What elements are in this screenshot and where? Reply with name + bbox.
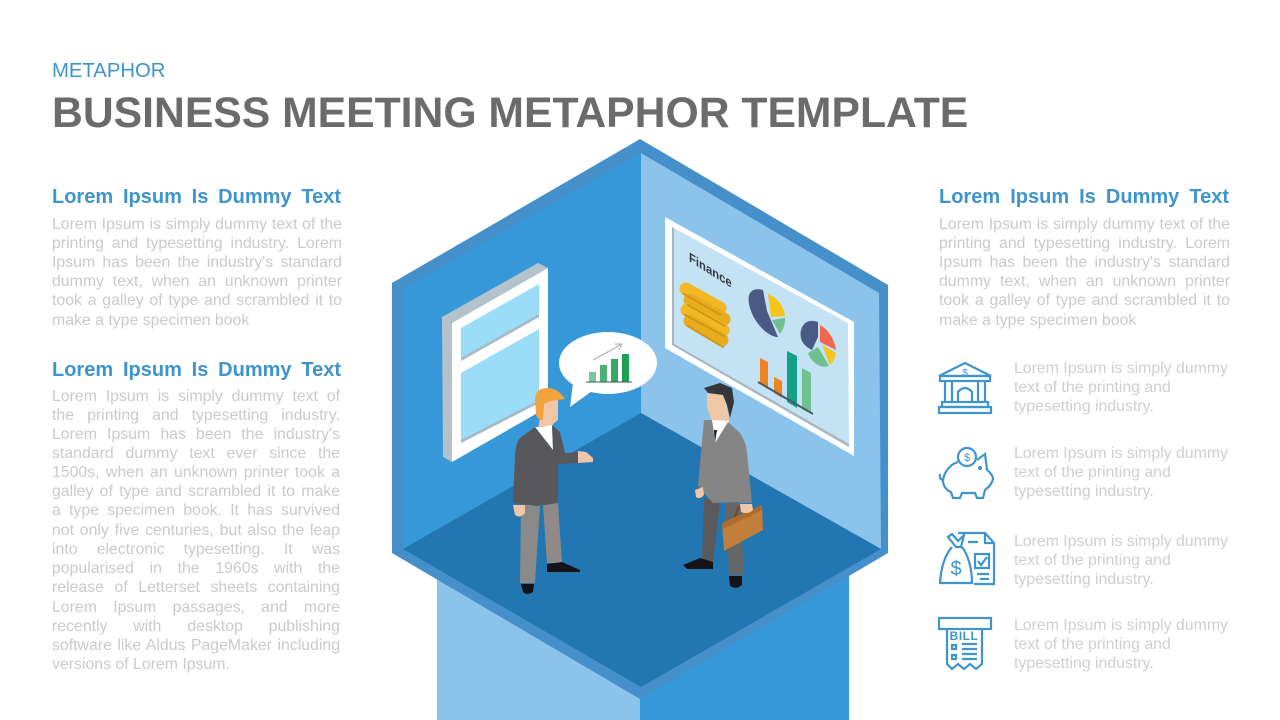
right heading: Lorem Ipsum Is Dummy Text xyxy=(939,186,1229,208)
pie chart one xyxy=(749,289,785,337)
speech bubble xyxy=(559,332,657,407)
icon: money bag and document: $ xyxy=(950,558,962,580)
bank item text: text of the printing and xyxy=(1014,379,1171,396)
left text block two: versions of Lorem Ipsum. xyxy=(52,656,230,673)
coins xyxy=(684,289,725,347)
piggy bank item text xyxy=(1014,445,1228,500)
left heading two: Lorem Ipsum Is Dummy Text xyxy=(52,359,341,381)
bank item text: Lorem Ipsum is simply dummy xyxy=(1014,360,1228,377)
icon: money bag and document xyxy=(940,533,994,584)
left text block two xyxy=(52,388,340,673)
man one xyxy=(513,388,593,594)
title: BUSINESS MEETING METAPHOR TEMPLATE xyxy=(52,89,968,137)
icon: bank: $ xyxy=(962,368,968,379)
pie chart two xyxy=(801,321,836,367)
money bag item text xyxy=(1014,533,1228,588)
left text block two: standard dummy text ever since the xyxy=(52,445,340,462)
bubble bars xyxy=(586,344,632,382)
right text block: printing and typesetting industry. Lorem xyxy=(939,235,1230,252)
bill item text: Lorem Ipsum is simply dummy xyxy=(1014,617,1228,634)
bank item text xyxy=(1014,360,1228,415)
left text block one: make a type specimen book xyxy=(52,312,249,329)
right text block: Lorem Ipsum is simply dummy text of the xyxy=(939,216,1230,233)
money bag item text: text of the printing and xyxy=(1014,552,1171,569)
left text block two: the printing and typesetting industry. xyxy=(52,407,340,424)
icon: bill xyxy=(939,618,991,669)
presentation board xyxy=(665,217,854,456)
left text block two: galley of type and scrambled it to make xyxy=(52,483,340,500)
icon: bank xyxy=(939,363,991,413)
piggy bank item text: typesetting industry. xyxy=(1014,483,1154,500)
left text block two: software like Aldus PageMaker including xyxy=(52,637,340,654)
piggy bank item text: text of the printing and xyxy=(1014,464,1171,481)
man two xyxy=(683,383,763,588)
left text block two: 1500s, when an unknown printer took a xyxy=(52,464,340,481)
left text block two: release of Letterset sheets containing xyxy=(52,579,340,596)
left text block two: popularised in the 1960s with the xyxy=(52,560,340,577)
left text block one: Ipsum has been the industry's standard xyxy=(52,254,342,271)
right text block: took a galley of type and scrambled it to xyxy=(939,292,1230,309)
label: metaphor: METAPHOR xyxy=(52,60,165,82)
piggy bank item text: Lorem Ipsum is simply dummy xyxy=(1014,445,1228,462)
floor xyxy=(403,413,881,687)
money bag item text: Lorem Ipsum is simply dummy xyxy=(1014,533,1228,550)
left text block two: Lorem Ipsum has been the industry's xyxy=(52,426,340,443)
left text block one xyxy=(52,216,342,329)
left text block one: took a galley of type and scrambled it to xyxy=(52,292,342,309)
room outer frame xyxy=(392,139,888,699)
money bag item text: typesetting industry. xyxy=(1014,571,1154,588)
left text block two: into electronic typesetting. It was xyxy=(52,541,340,558)
right text block: Ipsum has been the industry's standard xyxy=(939,254,1230,271)
left text block two: Lorem Ipsum is simply dummy text of xyxy=(52,388,340,405)
bar chart on board xyxy=(758,351,813,414)
window xyxy=(442,263,548,462)
icon: piggy bank xyxy=(940,448,993,498)
briefcase xyxy=(722,505,763,551)
left wall xyxy=(403,153,641,549)
left text block one: printing and typesetting industry. Lorem xyxy=(52,235,342,252)
icon: piggy bank: $ xyxy=(964,452,970,464)
left text block one: Lorem Ipsum is simply dummy text of the xyxy=(52,216,342,233)
left text block two: not only five centuries, but also the leap xyxy=(52,522,340,539)
pedestal column xyxy=(437,570,849,720)
right text block xyxy=(939,216,1230,329)
bill item text: text of the printing and xyxy=(1014,636,1171,653)
left heading one: Lorem Ipsum Is Dummy Text xyxy=(52,186,341,208)
left text block two: Lorem Ipsum passages, and more xyxy=(52,599,340,616)
bill item text xyxy=(1014,617,1228,672)
left text block two: a type specimen book. It has survived xyxy=(52,502,340,519)
bank item text: typesetting industry. xyxy=(1014,398,1154,415)
left text block one: dummy text, when an unknown printer xyxy=(52,273,342,290)
right text block: dummy text, when an unknown printer xyxy=(939,273,1230,290)
right text block: make a type specimen book xyxy=(939,312,1136,329)
board heading: Finance: Finance xyxy=(689,249,732,291)
bill item text: typesetting industry. xyxy=(1014,655,1154,672)
left text block two: recently with desktop publishing xyxy=(52,618,340,635)
icon: bill: BILL xyxy=(950,629,978,643)
right wall xyxy=(641,153,881,549)
